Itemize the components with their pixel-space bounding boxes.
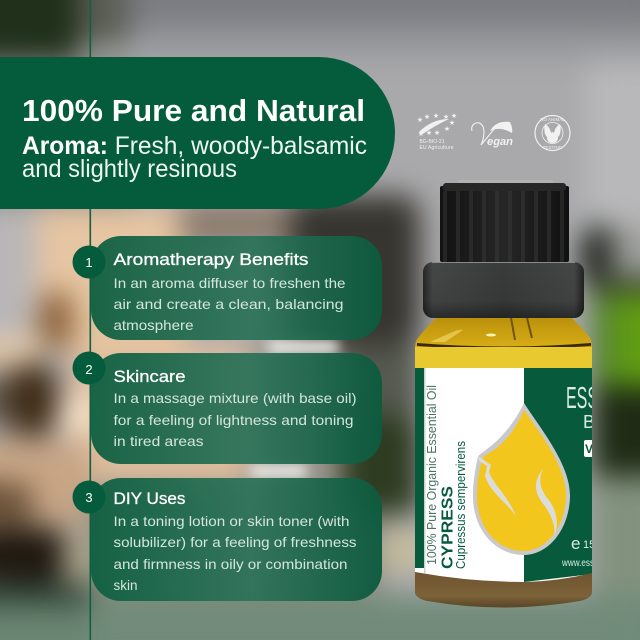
rotated label text: 100% Pure Organic Essential Oil [425,385,439,565]
icon: EU organic leaf: ★ [434,129,440,137]
number badge 1 [72,246,106,278]
number badge 3 [72,480,106,514]
icon: no animal testing: NO ANIMAL [540,117,565,122]
brand on green label: V [585,442,593,456]
rotated label text: Cupressus sempervirens [454,441,468,569]
body text: DIY uses: skin [114,577,138,593]
aroma description [22,132,367,183]
header panel [0,57,395,209]
icon: EU organic leaf: BG-BIO-21 [420,139,445,145]
brand on green label: B [583,412,595,432]
icon: EU organic leaf: ★ [418,130,424,138]
bottle [415,180,598,612]
bottle base [415,572,592,608]
icon: EU organic leaf: ★ [449,119,455,127]
heading: skincare: Skincare [114,367,186,386]
timeline vertical line [90,0,91,640]
icon: EU organic leaf: ★ [417,116,423,124]
icon: EU organic leaf: ★ [444,125,450,133]
glass meniscus line [417,343,591,349]
icon: EU organic leaf: EU Agriculture [420,145,454,151]
brand on green label [562,386,592,566]
icon: EU organic leaf: ★ [443,113,449,121]
bottle body [415,347,598,612]
number badge 1: 1 [85,255,93,270]
brand on green label: www.ess [561,558,594,569]
oil tube and highlights [430,318,532,342]
bottle cap top ribs [440,180,569,262]
body text: skincare: In a massage mixture (with base oil) [114,390,356,406]
aroma description: Aroma: Fresh, woody-balsamic [22,132,367,160]
label [415,368,592,583]
aroma description: and slightly resinous [22,155,237,183]
brand on green label: ESS [566,380,598,415]
body text: DIY uses: solubilizer) for a feeling of freshness [114,534,356,550]
icon: no animal testing [535,116,570,150]
body text: DIY uses: and firmness in oily or combination [114,556,348,572]
body text: aromatherapy: In an aroma diffuser to freshen the [114,275,346,291]
body text: DIY uses [114,513,356,593]
heading: aromatherapy benefits: Aromatherapy Benefits [114,250,308,269]
body text: skincare [114,390,356,449]
icon: EU organic leaf: ★ [424,113,430,121]
number badge 2 [72,352,106,384]
number badge 2: 2 [85,362,93,377]
heading: DIY uses: DIY Uses [114,489,186,508]
drop swirl highlights [478,456,516,516]
brand on green label: 15 [583,539,595,551]
number badge 3: 3 [85,490,93,505]
rotated label text [425,385,468,569]
panel: skincare [91,353,382,464]
rotated label text: CYPRESS [440,486,456,569]
bottle collar [423,262,584,318]
icon: EU organic leaf: ★ [451,112,457,120]
body text: DIY uses: In a toning lotion or skin toner (with [114,513,350,529]
icon: EU organic leaf [417,112,457,151]
heading: 100% Pure and Natural: 100% Pure and Natural [22,93,365,128]
bottle glass shoulder [415,316,592,348]
brand on green label: e [571,534,580,553]
body text: aromatherapy: atmosphere [114,317,194,333]
body text: skincare: in tired areas [114,433,204,449]
oil drop logo [473,403,570,555]
body text: aromatherapy: air and create a clean, balancing [114,296,344,312]
icon: EU organic leaf: ★ [426,129,432,137]
icon: EU organic leaf: ★ [433,112,439,120]
panel: DIY uses [91,478,382,601]
body text: skincare: for a feeling of lightness and toning [114,412,354,428]
icon: vegan mark: egan [487,136,513,148]
icon: no animal testing: TESTING [543,145,563,150]
panel: aromatherapy benefits [91,236,382,340]
body text: aromatherapy [114,275,346,333]
icon: vegan mark [472,122,513,148]
